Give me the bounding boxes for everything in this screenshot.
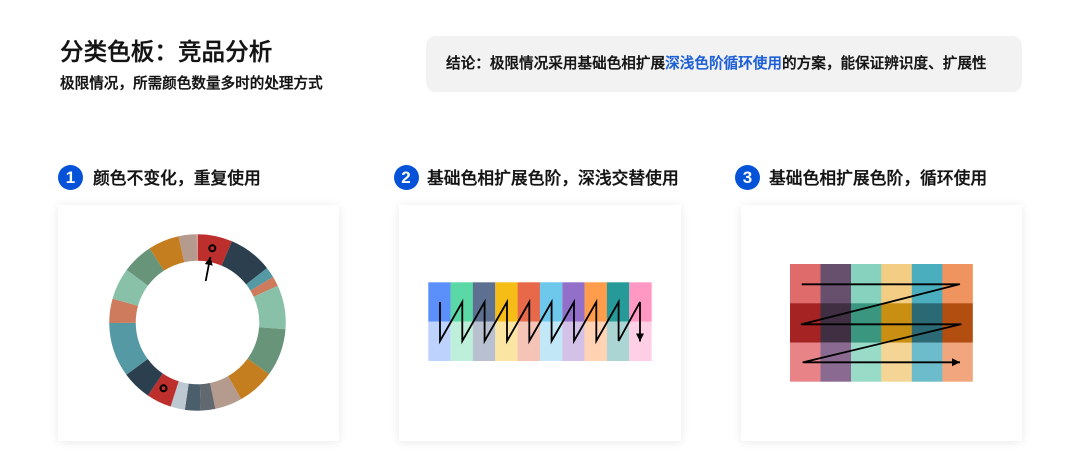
step 3 badge: 3	[743, 168, 752, 187]
panel: card 1 background	[58, 205, 339, 441]
step 2 heading: 基础色相扩展色阶，深浅交替使用	[427, 169, 679, 188]
conclusion callout	[426, 36, 1022, 92]
donut chart: repeated colours	[122, 248, 272, 398]
title: 分类色板：竞品分析	[60, 40, 272, 66]
step 1 badge: 1	[66, 168, 75, 187]
arrow: start of colour loop	[206, 257, 210, 281]
zigzag arrow: alternating deep and light	[440, 302, 640, 342]
zigzag arrow: row by row cycle	[802, 284, 961, 362]
step 1 badge	[58, 165, 83, 190]
step 3 badge	[735, 165, 760, 190]
subtitle: 极限情况，所需颜色数量多时的处理方式	[60, 76, 323, 92]
step 2 badge: 2	[401, 168, 411, 187]
colour grid: deep and light swatches	[428, 282, 652, 361]
colour grid: cycled hues	[790, 264, 973, 382]
panel: card 2 background	[399, 205, 681, 441]
step 2 badge	[394, 165, 418, 190]
marker: first repeat point	[209, 245, 215, 251]
conclusion text: 结论：极限情况采用基础色相扩展深浅色阶循环使用的方案，能保证辨识度、扩展性	[446, 56, 987, 72]
step 3 heading: 基础色相扩展色阶，循环使用	[769, 169, 987, 188]
step 1 heading: 颜色不变化，重复使用	[93, 169, 261, 188]
marker: second repeat point	[160, 385, 166, 391]
panel: card 3 background	[741, 205, 1022, 441]
